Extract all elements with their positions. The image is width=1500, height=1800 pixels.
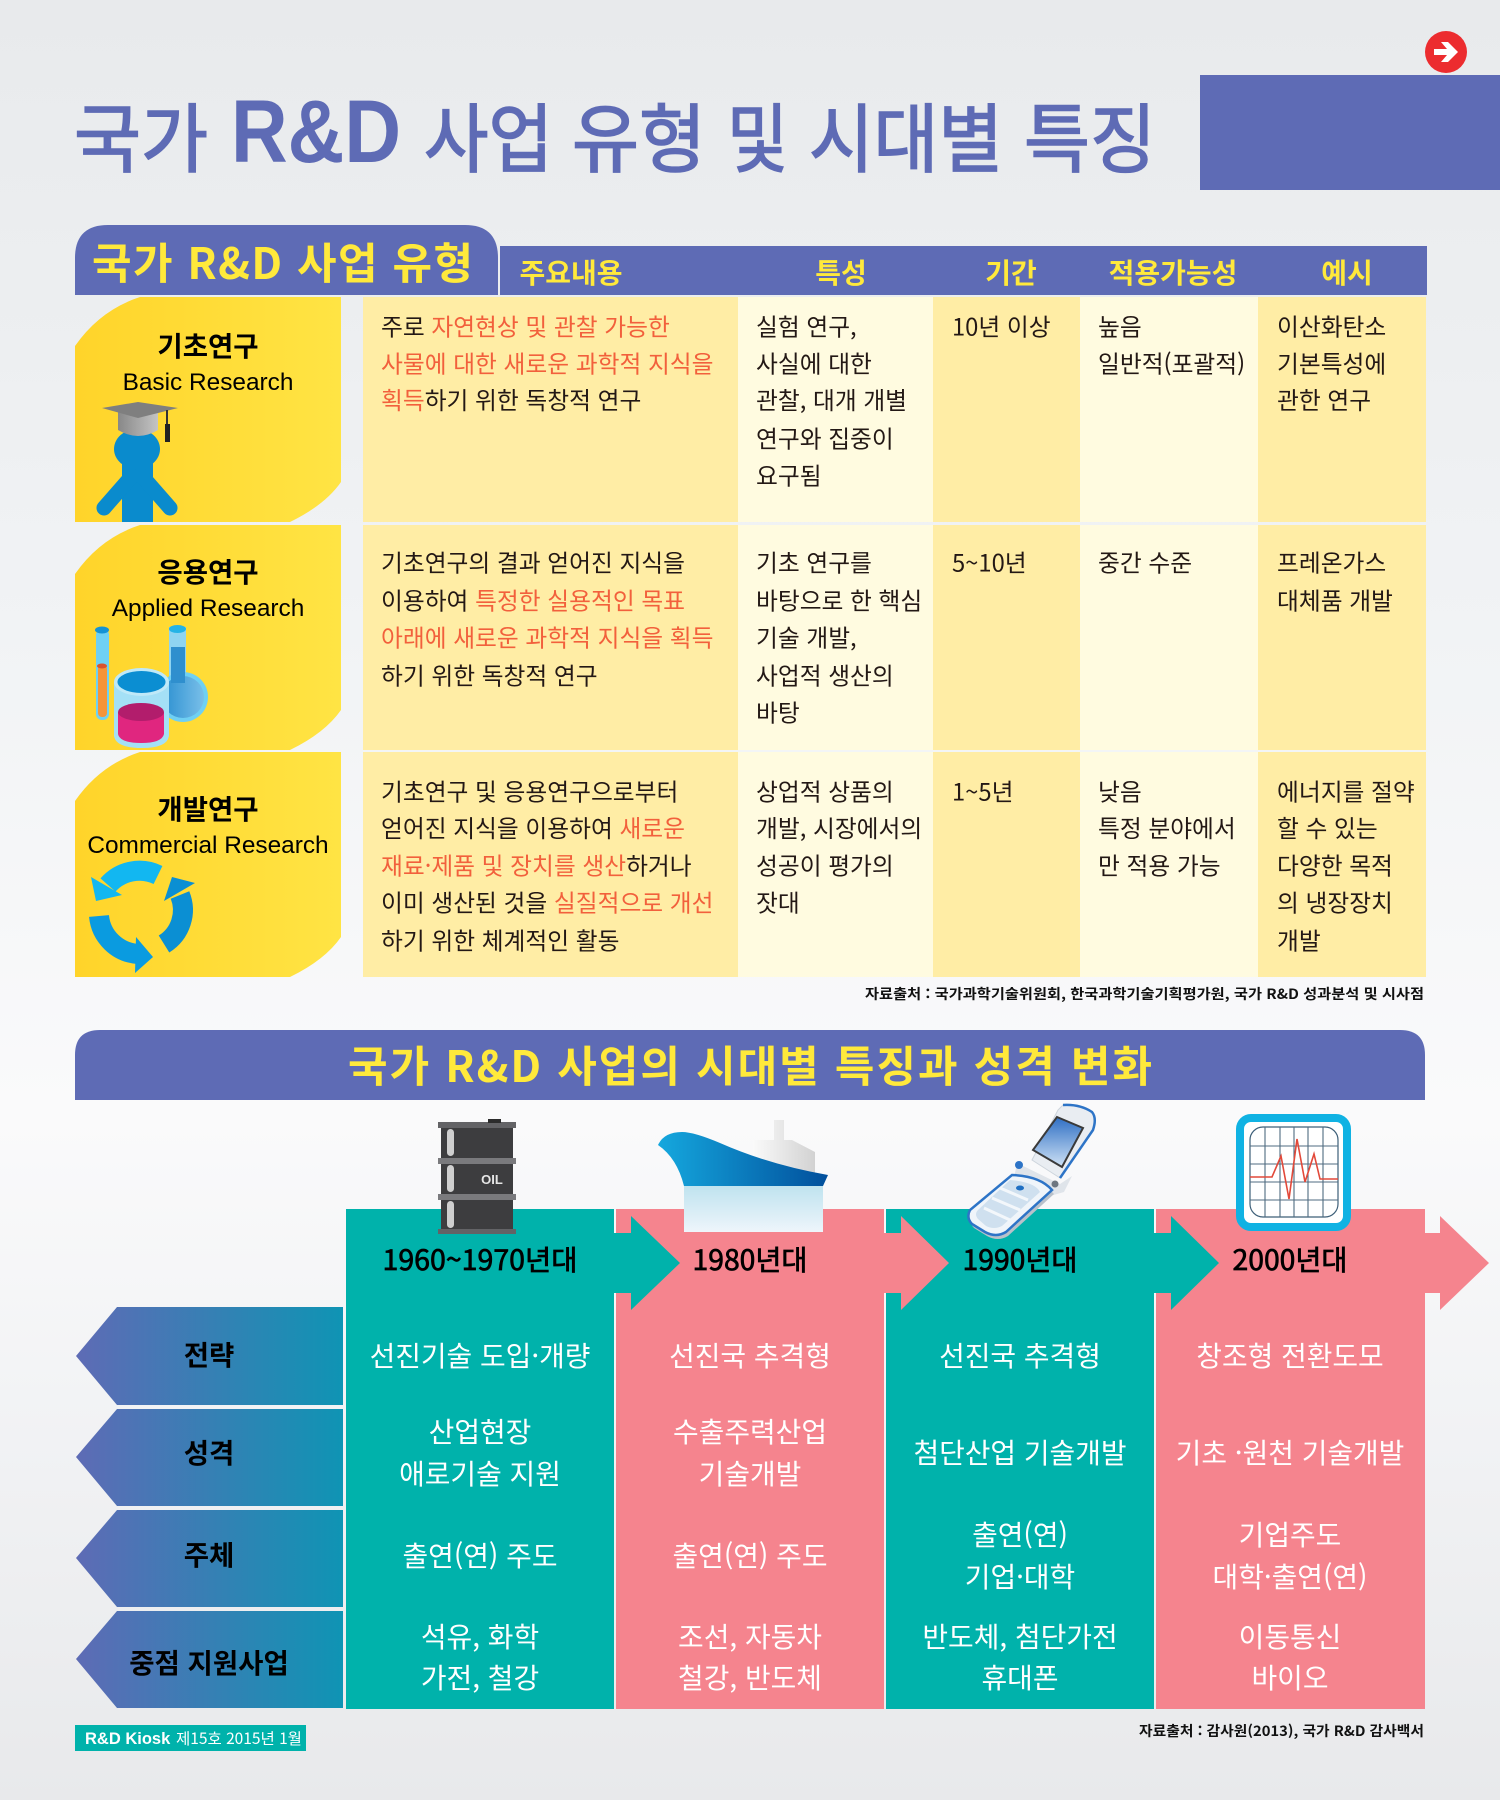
column: applicability	[1098, 308, 1245, 882]
icon: oil barrel: OIL	[481, 1172, 503, 1187]
column: main content: 이미 생산된 것을 실질적으로 개선	[381, 884, 714, 918]
era 1980s text: 수출주력산업	[673, 1411, 827, 1451]
era 1990s text: 선진국 추격형	[939, 1335, 1101, 1375]
source note 1: 자료출처 : 국가과학기술위원회, 한국과학기술기획평가원, 국가 R&D 성과분석 및 시사점	[865, 984, 1424, 1004]
icon: lab glassware	[95, 625, 208, 748]
title: 특징	[1024, 79, 1156, 188]
section heading band: 국가 R&D 사업의 시대별 특징과 성격 변화	[348, 1033, 1152, 1095]
era labels: 1960~1970년대	[382, 1239, 578, 1279]
row label: nature	[76, 1409, 343, 1506]
title: 및	[727, 79, 788, 188]
column: main content: 이용하여 특정한 실용적인 목표	[381, 582, 685, 616]
column: characteristics: 기술 개발,	[756, 618, 857, 654]
column: examples: 개발	[1277, 922, 1321, 956]
era 1980s text: 선진국 추격형	[669, 1335, 831, 1375]
row label: actor: 주체	[184, 1533, 234, 1573]
column: characteristics: 기초 연구를	[756, 544, 872, 578]
title: 국가	[74, 79, 208, 188]
era 1980s text: 철강, 반도체	[678, 1657, 822, 1697]
era 1960-70s text: 애로기술 지원	[399, 1453, 561, 1493]
row: basic research label	[75, 297, 341, 522]
column: characteristics: 연구와 집중이	[756, 420, 894, 454]
row: commercial research label: 개발연구	[157, 787, 259, 827]
panel: era timeline	[76, 1105, 1489, 1709]
column: characteristics: 개발, 시장에서의	[756, 809, 922, 844]
column: duration	[952, 308, 1051, 808]
column: examples: 의 냉장장치	[1277, 884, 1393, 918]
column: characteristics: 잣대	[756, 884, 800, 918]
column: duration: 10년 이상	[952, 308, 1051, 342]
era 1990s text	[913, 1335, 1127, 1697]
row: basic research label: Basic Research	[123, 369, 293, 396]
era 1960-70s text: 가전, 철강	[421, 1657, 539, 1697]
issue badge: R&D Kiosk	[85, 1730, 171, 1748]
column: characteristics: 상업적 상품의	[756, 772, 894, 808]
column: examples: 관한 연구	[1277, 381, 1371, 416]
table cell backgrounds	[363, 297, 1426, 977]
era 2000s text: 창조형 전환도모	[1196, 1335, 1384, 1375]
era 1990s text: 반도체, 첨단가전	[922, 1616, 1118, 1656]
era 2000s text: 기업주도	[1239, 1514, 1341, 1554]
column: main content: 주로 자연현상 및 관찰 가능한	[381, 308, 670, 342]
row label: actor	[76, 1510, 343, 1607]
column: applicability: 높음	[1098, 308, 1142, 342]
era labels	[382, 1239, 1348, 1279]
row label: strategy: 전략	[184, 1333, 234, 1373]
panel: research types table	[75, 225, 1427, 977]
column: applicability: 낮음	[1098, 772, 1142, 808]
era 1960-70s text: 선진기술 도입·개량	[370, 1335, 590, 1375]
row: basic research label: 기초연구	[157, 324, 259, 364]
column: characteristics: 성공이 평가의	[756, 846, 894, 882]
era 1980s text: 조선, 자동차	[678, 1616, 822, 1656]
column: characteristics: 사실에 대한	[756, 344, 872, 380]
decorative title block	[1200, 75, 1500, 190]
era 1960-70s text: 산업현장	[429, 1411, 531, 1451]
column: characteristics: 관찰, 대개 개별	[756, 381, 907, 416]
table header: 예시	[1321, 252, 1373, 292]
title: R&D	[231, 81, 401, 181]
column: main content: 사물에 대한 새로운 과학적 지식을	[381, 344, 714, 380]
column: duration: 5~10년	[952, 544, 1027, 578]
column: examples: 대체품 개발	[1277, 582, 1393, 616]
column: applicability: 중간 수준	[1098, 544, 1192, 578]
era labels: 1990년대	[962, 1239, 1078, 1279]
row: applied research label: Applied Research	[112, 595, 304, 622]
column: characteristics: 사업적 생산의	[756, 656, 894, 692]
column: main content: 기초연구의 결과 얻어진 지식을	[381, 544, 685, 578]
column: characteristics: 바탕	[756, 694, 800, 728]
issue badge: 제15호 2015년 1월	[176, 1727, 302, 1749]
icon: monitor with pulse	[1240, 1118, 1347, 1227]
column: characteristics: 요구됨	[756, 456, 822, 492]
era 2000s text: 대학·출연(연)	[1213, 1556, 1367, 1596]
column: examples	[1277, 308, 1415, 956]
row label: priority programs: 중점 지원사업	[129, 1641, 289, 1681]
table header: 적용가능성	[1109, 252, 1237, 292]
table header	[500, 246, 1427, 295]
row: commercial research label: Commercial Research	[87, 832, 329, 859]
era 2000s text: 기초 ·원천 기술개발	[1176, 1432, 1404, 1472]
era 1990s text: 기업·대학	[965, 1556, 1075, 1596]
icon: red arrow button	[1425, 31, 1467, 73]
source note 2: 자료출처 : 감사원(2013), 국가 R&D 감사백서	[1139, 1721, 1424, 1741]
era 2000s text	[1176, 1335, 1404, 1697]
row label: priority programs	[76, 1611, 343, 1708]
column: examples: 에너지를 절약	[1277, 772, 1415, 808]
era 1980s text: 출연(연) 주도	[673, 1535, 827, 1575]
title	[74, 79, 1156, 188]
heading tab: 국가 R&D 사업 유형	[92, 230, 473, 292]
era labels: 2000년대	[1232, 1239, 1348, 1279]
icon: ship	[658, 1120, 828, 1232]
column: main content: 아래에 새로운 과학적 지식을 획득	[381, 618, 714, 654]
issue badge	[75, 1725, 306, 1751]
era labels: 1980년대	[692, 1239, 808, 1279]
column: examples: 기본특성에	[1277, 344, 1386, 380]
column: applicability: 특정 분야에서	[1098, 809, 1236, 844]
column: main content	[381, 308, 714, 956]
icon: graduate	[102, 402, 178, 522]
arrows between eras	[614, 1216, 1489, 1310]
era 1990s text: 첨단산업 기술개발	[913, 1432, 1127, 1472]
era 1980s text	[669, 1335, 831, 1697]
title: 사업	[424, 79, 553, 188]
column: main content: 획득하기 위한 독창적 연구	[381, 381, 641, 416]
column: examples: 프레온가스	[1277, 544, 1386, 578]
title: 유형	[572, 79, 706, 188]
era 1960-70s text: 석유, 화학	[421, 1616, 539, 1656]
era 2000s text: 바이오	[1252, 1657, 1328, 1697]
column: examples: 이산화탄소	[1277, 308, 1386, 342]
era 2000s text: 이동통신	[1239, 1616, 1341, 1656]
row label: strategy	[76, 1307, 343, 1405]
column: characteristics: 실험 연구,	[756, 308, 857, 342]
icon: cycle arrows	[91, 871, 195, 973]
column: main content: 하기 위한 체계적인 활동	[381, 922, 619, 956]
era 1960-70s text: 출연(연) 주도	[403, 1535, 557, 1575]
column: characteristics	[756, 308, 922, 918]
era 1960-70s text	[370, 1335, 590, 1697]
column: examples: 다양한 목적	[1277, 846, 1393, 882]
column: main content: 기초연구 및 응용연구으로부터	[381, 772, 678, 808]
title: 시대별	[809, 79, 1003, 188]
row label: nature: 성격	[184, 1431, 234, 1471]
table header: 특성	[815, 252, 867, 292]
column: main content: 얻어진 지식을 이용하여 새로운	[381, 809, 685, 844]
section heading band	[75, 1030, 1425, 1100]
column: main content: 재료·제품 및 장치를 생산하거나	[381, 846, 692, 882]
era columns	[346, 1209, 1425, 1709]
table header: 주요내용	[519, 252, 623, 292]
era 1980s text: 기술개발	[699, 1453, 801, 1493]
column: main content: 하기 위한 독창적 연구	[381, 656, 598, 692]
row: applied research label: 응용연구	[157, 550, 259, 590]
row: commercial research label	[75, 752, 341, 977]
table header: 기간	[985, 252, 1037, 292]
row: applied research label	[75, 525, 341, 750]
column: characteristics: 바탕으로 한 핵심	[756, 582, 922, 616]
column: applicability: 일반적(포괄적)	[1098, 344, 1245, 380]
column: applicability: 만 적용 가능	[1098, 846, 1221, 882]
era 1990s text: 출연(연)	[972, 1514, 1068, 1554]
column: duration: 1~5년	[952, 772, 1013, 808]
era 1990s text: 휴대폰	[982, 1657, 1058, 1697]
icon: flip phone	[968, 1105, 1095, 1239]
column: examples: 할 수 있는	[1277, 809, 1378, 844]
icon: oil barrel	[438, 1119, 516, 1234]
